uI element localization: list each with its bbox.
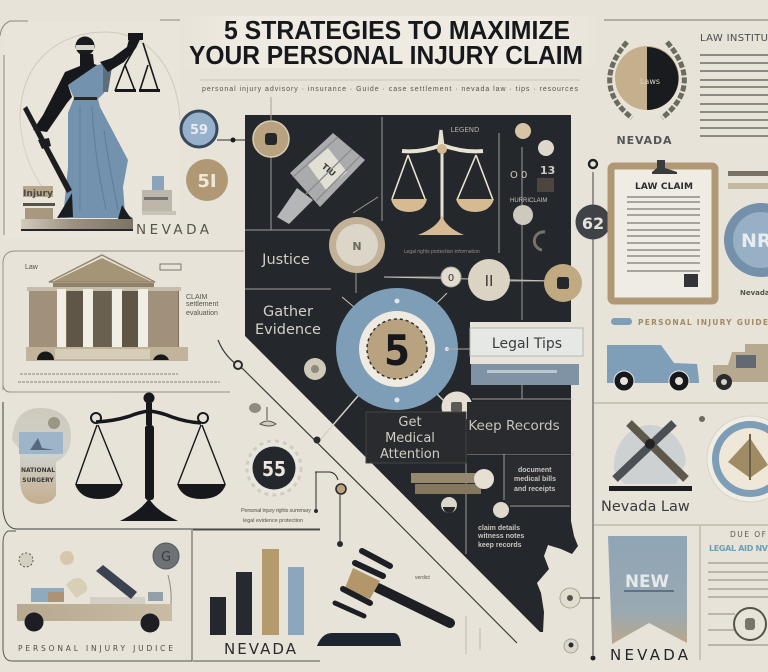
panel: ribbon: [608, 526, 700, 664]
clipboard: law claim: [611, 160, 715, 301]
book stack: Injury: [23, 189, 53, 199]
title: 5 STRATEGIES TO MAXIMIZE: [224, 15, 570, 45]
icon: gavel: [317, 551, 450, 646]
panel: nevada map dark: [217, 97, 582, 632]
panel: big scale: [3, 392, 320, 529]
node: tan top: [217, 97, 289, 157]
icon cluster top right: [510, 123, 555, 250]
icon: van: [607, 345, 699, 391]
text block: [25, 264, 218, 317]
caption: Personal injury rights summary: [241, 508, 311, 514]
icon: injury card: SURGERY: [22, 477, 54, 484]
subtitle line: personal injury advisory · insurance · Guide · case settlement · nevada law · tips · resources: [202, 86, 578, 93]
icon: gavel dark: TIU: [320, 162, 337, 178]
clipboard: law claim: LAW CLAIM: [635, 182, 693, 192]
law block: [142, 176, 176, 215]
law institute block: [604, 20, 768, 136]
label: get medical attention: Get: [398, 415, 422, 430]
document panel: DUE OF: [730, 530, 766, 539]
label: nevada law: Nevada Law: [601, 499, 690, 515]
icon cluster top right: 13: [540, 164, 555, 177]
caption: legal evidence protection: [243, 518, 303, 524]
label: nevada: NEVADA: [610, 646, 689, 664]
node: central 5: 5: [384, 326, 410, 375]
book stack: [23, 186, 55, 219]
panel: courthouse: [3, 251, 244, 392]
icon: crossed gavels: [609, 423, 692, 491]
vertical connector with 62 badge: [576, 160, 610, 660]
icon: courthouse: [26, 255, 188, 361]
dark text bits: and receipts: [514, 486, 555, 493]
grid lines: [245, 117, 574, 554]
vertical connector with 62 badge: 62: [582, 214, 604, 233]
label: legal tips: Legal Tips: [492, 336, 562, 352]
label: gather evidence: [255, 304, 321, 338]
badge: tan circle: 5I: [197, 171, 217, 192]
text block: Law: [25, 264, 39, 271]
text block: settlement: [186, 301, 218, 308]
badge: 55: [247, 441, 301, 495]
icon: truck: [713, 344, 768, 390]
misc bottom marks: [415, 575, 600, 654]
panel: bottom left vehicle: [3, 530, 192, 661]
icon: lady justice statue: [23, 33, 160, 219]
label: nevada: NEVADA: [224, 640, 297, 658]
statue base: [21, 219, 133, 231]
icon: scale in hand: [115, 42, 158, 91]
diagonal line with dots: [218, 340, 517, 643]
seal: NR: [724, 171, 768, 297]
title: YOUR PERSONAL INJURY CLAIM: [189, 40, 583, 70]
panel: ribbon: NEW: [625, 572, 669, 592]
text block: evaluation: [186, 310, 218, 317]
dark text bits: claim details: [478, 525, 520, 532]
dark text bits: keep records: [478, 542, 522, 549]
nodes row: II: [485, 272, 493, 290]
document panel: [708, 530, 768, 645]
node: central 5: [320, 288, 458, 440]
badge: 55: 55: [262, 457, 286, 481]
icon: car: [17, 565, 172, 632]
label: get medical attention: Medical: [385, 431, 435, 446]
label: keep records: [467, 402, 571, 454]
nodes row: [304, 259, 582, 380]
node: beige N: [329, 217, 385, 273]
caption lines: [18, 374, 220, 382]
law institute block: LAW INSTITU: [700, 33, 768, 44]
dark text bits: medical bills: [514, 476, 556, 483]
badge: blue circle: 59: [190, 123, 208, 138]
icon cluster top right: HURRICLAIM: [510, 198, 547, 204]
pills: [411, 469, 509, 518]
panel: bar chart: [193, 530, 320, 661]
icon: gold scale: LEGEND: [451, 126, 479, 134]
icon: gold scale: [391, 126, 494, 255]
document panel: LEGAL AID NV: [709, 544, 768, 553]
icon: injury card: [12, 408, 71, 504]
icon: seal: [707, 416, 768, 502]
small icon cluster: [249, 403, 276, 426]
badge: tan circle: [186, 159, 228, 201]
label: get medical attention: [366, 412, 466, 463]
label: justice: Justice: [261, 252, 310, 268]
panel: lady justice: [0, 20, 210, 238]
caption: PERSONAL INJURY JUDICE: [18, 644, 173, 653]
icon: gold scale: Legal rights protection information: [404, 249, 480, 255]
label: keep records: Keep Records: [468, 418, 560, 434]
node: records: [442, 392, 472, 422]
dark text bits: [477, 456, 571, 549]
icon cluster top right: O 0: [510, 170, 527, 181]
label: get medical attention: Attention: [380, 447, 440, 462]
emblem: laurel: [610, 42, 684, 118]
label: gather evidence: Evidence: [255, 322, 321, 338]
label: nevada: NEVADA: [616, 134, 672, 147]
panel: nevada law: [594, 403, 768, 525]
title: [180, 15, 600, 70]
text block: CLAIM: [186, 294, 208, 301]
node: beige N: N: [352, 240, 362, 253]
misc bottom marks: verdict: [415, 575, 430, 581]
tagline strip: PERSONAL INJURY GUIDE: [638, 318, 768, 327]
small icons: [19, 543, 179, 569]
label: gather evidence: Gather: [263, 304, 313, 320]
caption: [241, 508, 311, 524]
label: legal tips: [447, 322, 583, 385]
icon: injury card: NATIONAL: [21, 467, 55, 474]
icon: gavel dark: [277, 133, 365, 224]
badge: blue circle: [181, 111, 217, 147]
emblem: laurel: Laws: [640, 77, 660, 86]
nodes row: 0: [448, 273, 454, 284]
dark text bits: witness notes: [477, 533, 524, 540]
dark text bits: document: [518, 467, 552, 474]
icon: balance scale: [75, 392, 226, 521]
small icons: G: [161, 550, 171, 565]
nevada label: NEVADA: [136, 222, 210, 238]
